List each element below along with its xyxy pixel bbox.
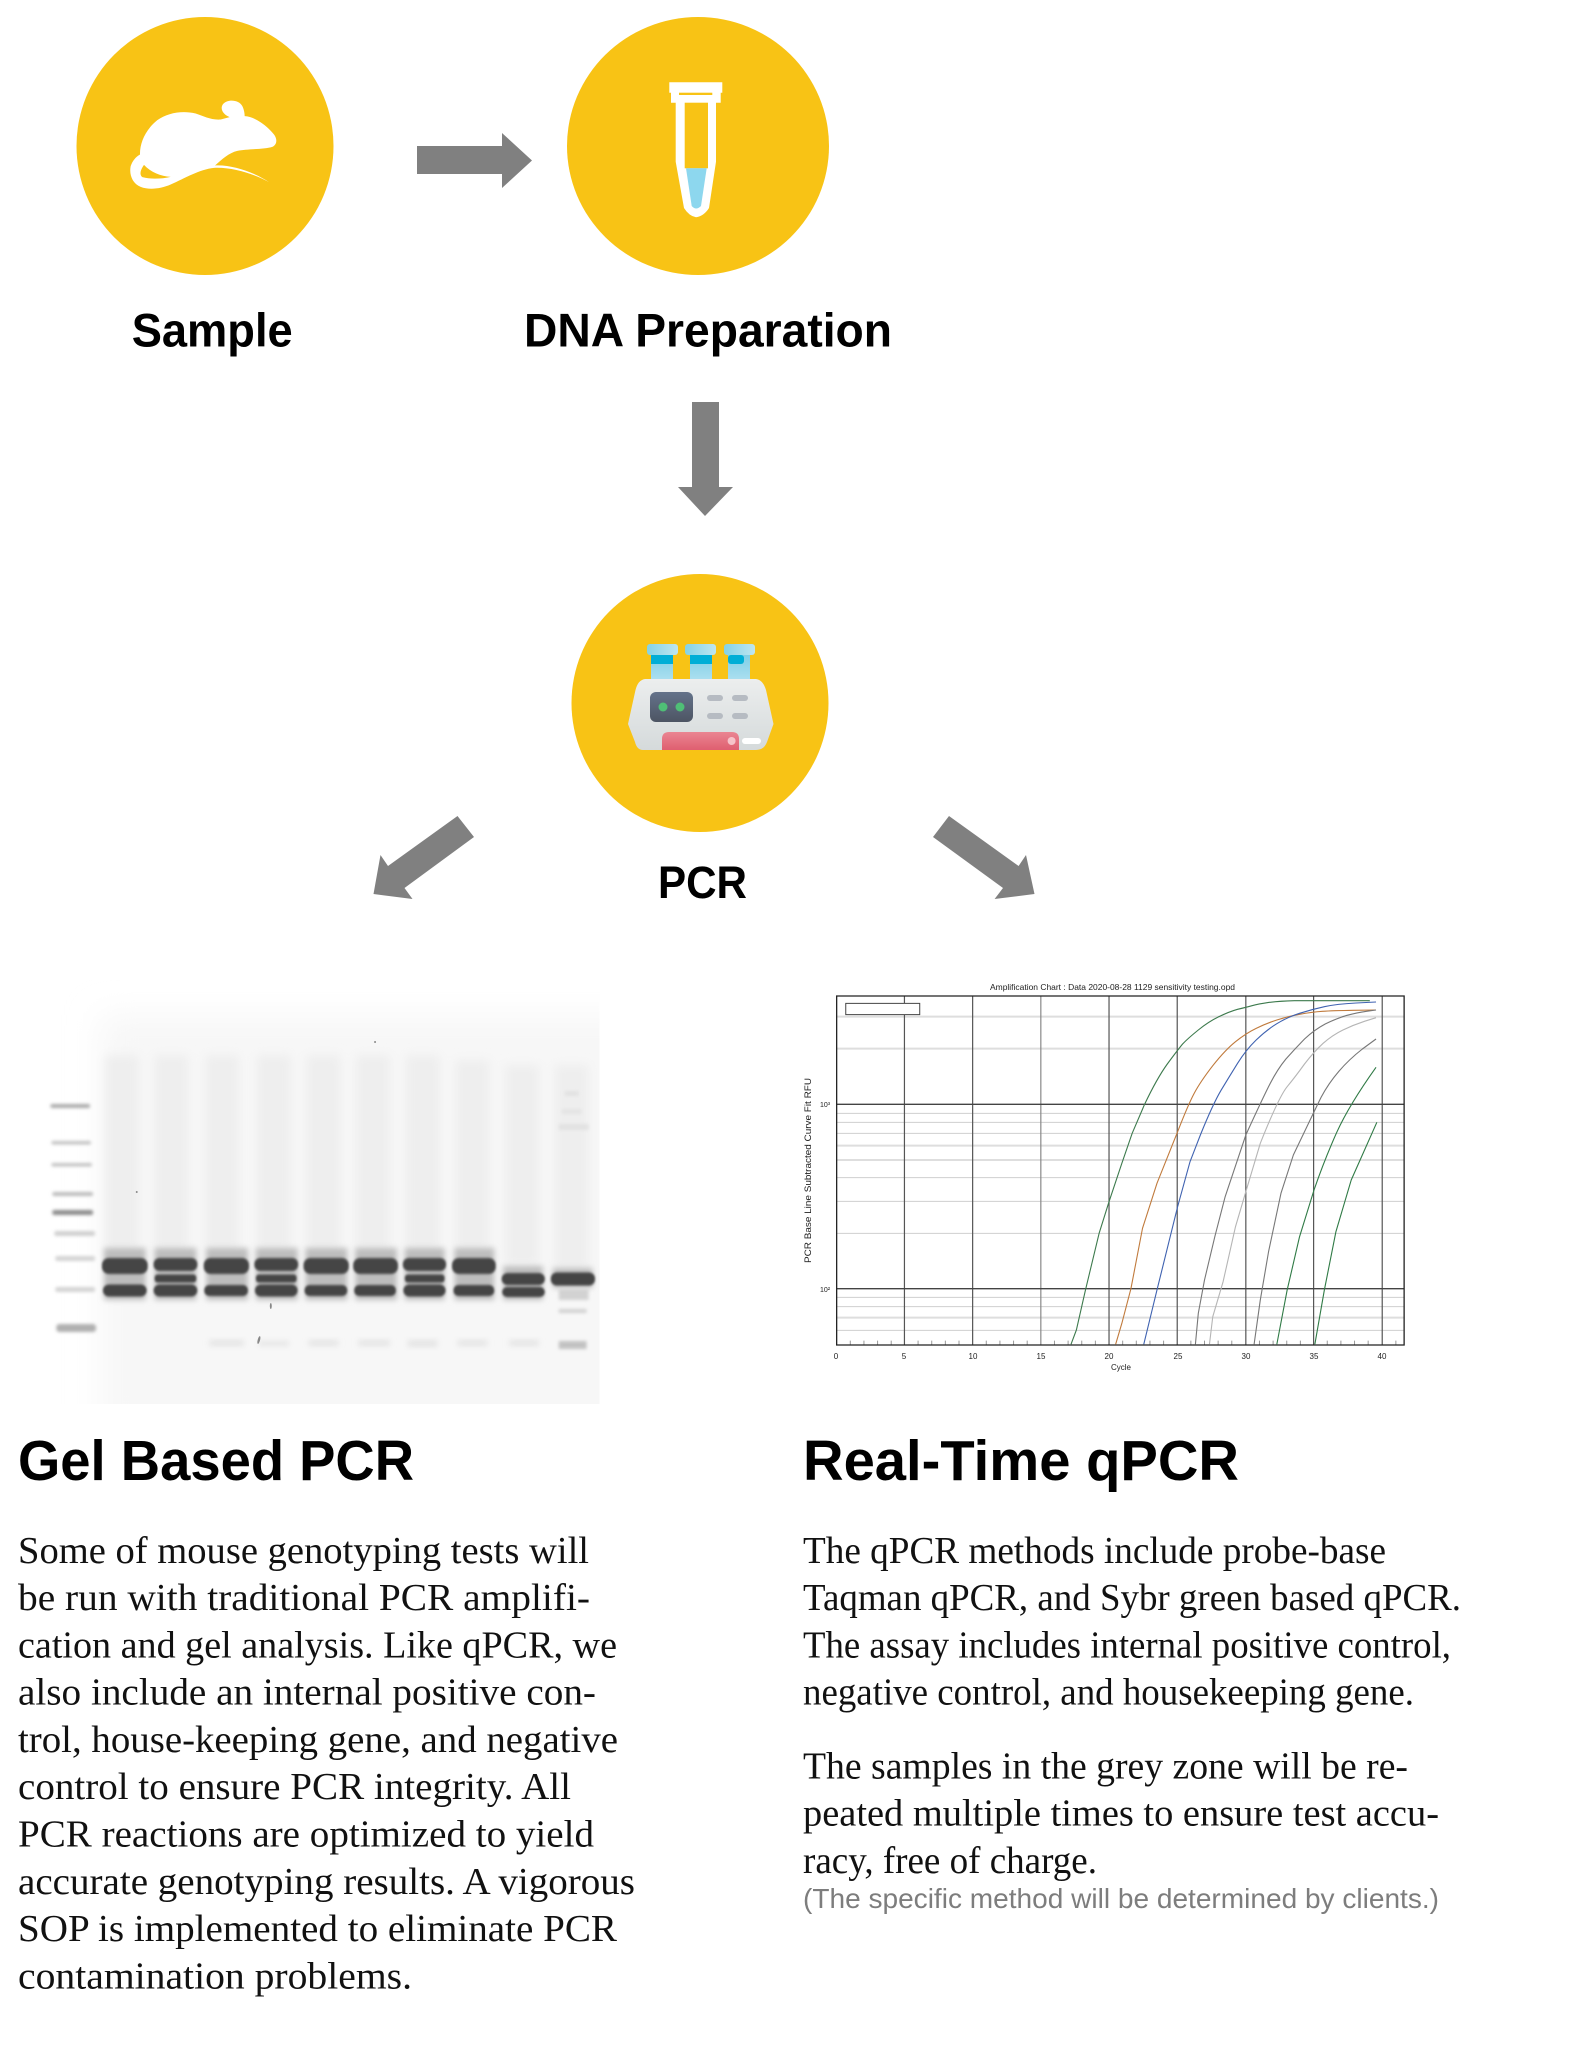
text block: qPCR methods bbox=[803, 1530, 1461, 1713]
DNA ladder bbox=[50, 1104, 96, 1332]
text block: qPCR methods: The qPCR methods include probe-base bbox=[803, 1530, 1386, 1572]
x axis ticks: 30 bbox=[1242, 1352, 1251, 1361]
x axis ticks: 20 bbox=[1105, 1352, 1114, 1361]
text block: gel based PCR description: PCR reactions are optimized to yield bbox=[18, 1814, 594, 1856]
text block: qPCR methods: The assay includes internal positive control, bbox=[803, 1624, 1451, 1666]
band halo bbox=[104, 1248, 593, 1300]
text block: qPCR methods: Taqman qPCR, and Sybr green based qPCR. bbox=[803, 1577, 1461, 1619]
text block: gel based PCR description: trol, house-keeping gene, and negative bbox=[18, 1719, 618, 1761]
lane 10 extra bands bbox=[559, 1091, 589, 1349]
x axis ticks: 40 bbox=[1378, 1352, 1387, 1361]
icon: mouse bbox=[130, 101, 276, 189]
x axis ticks: 5 bbox=[902, 1352, 907, 1361]
text block: gel based PCR description: control to ensure PCR integrity. All bbox=[18, 1766, 571, 1808]
x axis ticks: 10 bbox=[969, 1352, 978, 1361]
y axis ticks: 10³ bbox=[820, 1102, 831, 1109]
circle: sample bbox=[76, 17, 334, 275]
text block: grey zone samples: racy, free of charge. bbox=[803, 1840, 1097, 1882]
text block: gel based PCR description bbox=[18, 1530, 635, 1998]
icon: thermocycler bbox=[628, 644, 774, 750]
DNA bands bbox=[102, 1258, 595, 1297]
circle: DNA preparation bbox=[567, 17, 829, 275]
heading: Real-Time qPCR: Real-Time qPCR bbox=[803, 1429, 1239, 1493]
text block: gel based PCR description: be run with traditional PCR amplifi- bbox=[18, 1577, 590, 1619]
plot bbox=[837, 996, 1404, 1345]
icon: test tube bbox=[669, 82, 722, 217]
arrow: PCR to gel bbox=[374, 816, 474, 899]
label: DNA Preparation: DNA Preparation bbox=[524, 304, 892, 356]
legend box bbox=[846, 1003, 920, 1015]
x axis ticks: 25 bbox=[1174, 1352, 1183, 1361]
x axis ticks bbox=[834, 1352, 1387, 1361]
text block: gel based PCR description: cation and gel analysis. Like qPCR, we bbox=[18, 1624, 617, 1666]
text block: qPCR methods: negative control, and housekeeping gene. bbox=[803, 1671, 1414, 1713]
lane smears bbox=[105, 1055, 589, 1270]
text block: gel based PCR description: SOP is implemented to eliminate PCR bbox=[18, 1908, 618, 1950]
y axis label: PCR Base Line Subtracted Curve Fit RFU bbox=[803, 1078, 814, 1263]
text block: gel based PCR description: also include an internal positive con- bbox=[18, 1671, 596, 1713]
arrow: PCR to qPCR bbox=[933, 816, 1034, 899]
text block: gel based PCR description: accurate genotyping results. A vigorous bbox=[18, 1861, 635, 1903]
text block: gel based PCR description: contamination problems. bbox=[18, 1956, 412, 1998]
amplification chart bbox=[803, 982, 1404, 1372]
arrow: sample to DNA preparation bbox=[417, 133, 532, 188]
label: Sample: Sample bbox=[132, 304, 293, 356]
amplification curves bbox=[1071, 1001, 1377, 1344]
x axis ticks: 35 bbox=[1310, 1352, 1319, 1361]
faint lower bands bbox=[209, 1340, 539, 1347]
circle: PCR bbox=[572, 574, 828, 832]
note: method determined by clients: (The specific method will be determined by clients.) bbox=[803, 1883, 1439, 1914]
arrow: DNA preparation to PCR bbox=[678, 402, 733, 516]
gel electrophoresis image bbox=[49, 1041, 600, 1353]
text block: grey zone samples bbox=[803, 1746, 1439, 1882]
specks bbox=[136, 1041, 376, 1344]
chart title: Amplification Chart : Data 2020-08-28 1129 sensitivity testing.opd bbox=[990, 982, 1235, 992]
text block: grey zone samples: peated multiple times to ensure test accu- bbox=[803, 1793, 1439, 1835]
y axis ticks: 10² bbox=[820, 1287, 831, 1294]
x axis ticks: 0 bbox=[834, 1352, 839, 1361]
text block: gel based PCR description: Some of mouse genotyping tests will bbox=[18, 1530, 589, 1572]
heading: Gel Based PCR: Gel Based PCR bbox=[18, 1429, 414, 1493]
label: PCR: PCR bbox=[658, 857, 747, 908]
x axis label: Cycle bbox=[1111, 1363, 1132, 1372]
text block: grey zone samples: The samples in the grey zone will be re- bbox=[803, 1746, 1408, 1788]
y axis ticks bbox=[820, 1102, 831, 1294]
x axis ticks: 15 bbox=[1037, 1352, 1046, 1361]
